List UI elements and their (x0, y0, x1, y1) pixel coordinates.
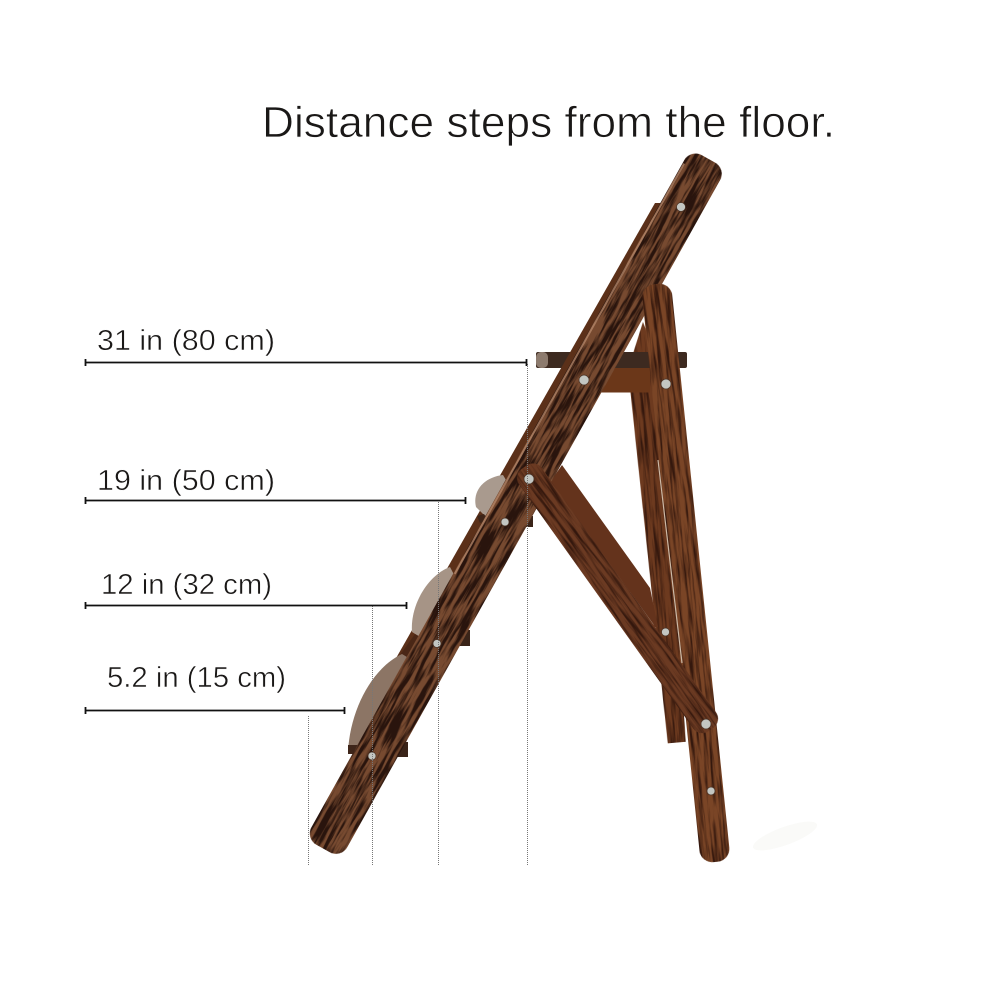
measurement: 19 in: 19 in (50 cm) (97, 465, 275, 497)
dotted guide lines (308, 364, 528, 866)
thin diagonal brace (550, 465, 658, 627)
title: Distance steps from the floor. (262, 98, 835, 147)
measurement: 5.2 in (85, 662, 345, 714)
floor shadow (750, 816, 820, 856)
step 3 tread (475, 475, 533, 527)
step 1 tread (348, 654, 420, 760)
bolts (368, 202, 715, 795)
gap line between rear legs (658, 460, 682, 663)
measurement: 12 in: 12 in (32 cm) (101, 569, 272, 601)
measurement: 12 in (85, 569, 407, 609)
step ladder (305, 149, 731, 863)
rear outer leg (641, 282, 731, 863)
measurement: 19 in (85, 465, 466, 504)
main diagonal brace (513, 459, 722, 738)
top platform (536, 352, 687, 392)
measurement: 31 in: 31 in (80 cm) (97, 325, 275, 357)
front leg (305, 149, 726, 858)
step 2 tread (400, 567, 470, 660)
measurement: 31 in (85, 325, 527, 366)
rear inner leg (624, 321, 693, 744)
side rail (395, 203, 668, 660)
measurement: 5.2 in: 5.2 in (15 cm) (107, 662, 286, 694)
